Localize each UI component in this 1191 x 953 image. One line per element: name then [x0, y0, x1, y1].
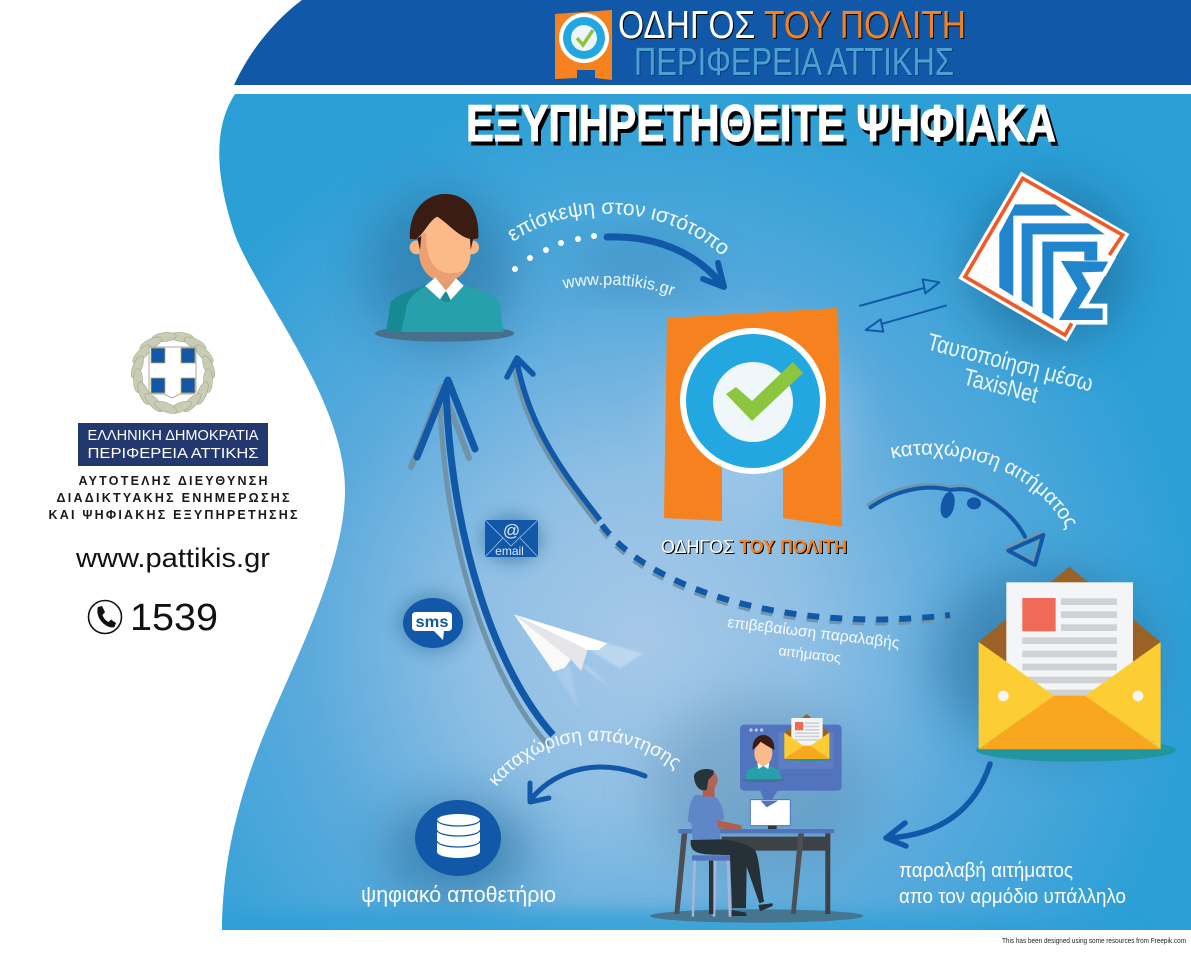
- header title: ΟΔΗΓΟΣ ΤΟΥ ΠΟΛΙΤΗ: [618, 4, 966, 47]
- website: www.pattikis.gr: [75, 543, 270, 573]
- arrow: register response: [530, 767, 645, 802]
- label: logo wordmark: ΟΔΗΓΟΣ ΤΟΥ ΠΟΛΙΤΗ: [661, 537, 847, 557]
- illustration: employee at desk: [650, 714, 863, 923]
- icon: citizen avatar: [375, 194, 514, 342]
- badge: hellenic republic: ΠΕΡΙΦΕΡΕΙΑ ΑΤΤΙΚΗΣ: [88, 445, 258, 462]
- label: visit the website: επίσκεψη στον ιστότοπο: [508, 202, 728, 254]
- phone number: 1539: [130, 597, 218, 639]
- badge: hellenic republic: ΕΛΛΗΝΙΚΗ ΔΗΜΟΚΡΑΤΙΑ: [88, 427, 258, 444]
- label: submit request: καταχώριση αιτήματος: [891, 440, 1076, 530]
- badge: hellenic republic: [78, 423, 268, 466]
- desk: [674, 829, 834, 914]
- arrow: visit website: [512, 233, 724, 287]
- label: taxisnet identification: Ταυτοποίηση μέσω: [924, 329, 1096, 397]
- left column: organisation info: [48, 331, 298, 639]
- icon: email envelope: @: [503, 521, 520, 540]
- arrow: forwarded to employee: [886, 764, 990, 846]
- icon: main orange logo: [664, 308, 842, 527]
- label: website url: www.pattikis.gr: [562, 274, 676, 296]
- directorate name: ΚΑΙ ΨΗΦΙΑΚΗΣ ΕΞΥΠΗΡΕΤΗΣΗΣ: [48, 508, 298, 522]
- monitor: [750, 800, 790, 830]
- directorate name: ΑΥΤΟΤΕΛΗΣ ΔΙΕΥΘΥΝΣΗ: [78, 474, 268, 488]
- stool: [692, 855, 731, 917]
- icon: yellow envelope with letter: [976, 567, 1176, 762]
- directorate name: [48, 474, 298, 522]
- header logo: [555, 10, 612, 80]
- icon: sms bubble: [398, 593, 468, 653]
- arrow: receipt confirmation: [507, 358, 950, 622]
- main blue panel: [219, 94, 1191, 930]
- label: digital repository: ψηφιακό αποθετήριο: [361, 882, 556, 907]
- employee figure: [688, 769, 773, 916]
- main heading: ΕΞΥΠΗΡΕΤΗΘΕΙΤΕ ΨΗΦΙΑΚΑ: [466, 95, 1056, 153]
- screen bubble: [740, 714, 842, 807]
- arrows: exchange with taxisnet: [859, 279, 947, 332]
- icon: email envelope: email: [495, 544, 524, 558]
- icon: email envelope: [482, 515, 542, 563]
- arrow: submit request: [869, 485, 1043, 565]
- top header band: [234, 0, 1191, 85]
- arrow: response delivered to citizen: [411, 380, 553, 744]
- label: received by employee: απο τον αρμόδιο υπάλληλο: [899, 886, 1126, 908]
- label: received by employee: παραλαβή αιτήματος: [899, 860, 1073, 882]
- icon: sms bubble: sms: [416, 614, 449, 631]
- directorate name: ΔΙΑΔΙΚΤΥΑΚΗΣ ΕΝΗΜΕΡΩΣΗΣ: [56, 491, 290, 505]
- phone number: [88, 597, 218, 639]
- label: confirmation of receipt: αιτήματος: [778, 642, 842, 666]
- icon: greek coat of arms: [129, 331, 217, 416]
- icon: digital repository: [415, 800, 501, 876]
- label: confirmation of receipt: επιβεβαίωση παραλαβής: [727, 614, 900, 652]
- label: taxisnet identification: TaxisNet: [960, 364, 1041, 409]
- label: received by employee: [899, 860, 1126, 908]
- icon: gsis logo: [958, 172, 1129, 342]
- label: register response: καταχώριση απάντησης: [490, 728, 680, 786]
- icon: paper plane: [514, 614, 643, 708]
- header subtitle: ΠΕΡΙΦΕΡΕΙΑ ΑΤΤΙΚΗΣ: [634, 41, 954, 84]
